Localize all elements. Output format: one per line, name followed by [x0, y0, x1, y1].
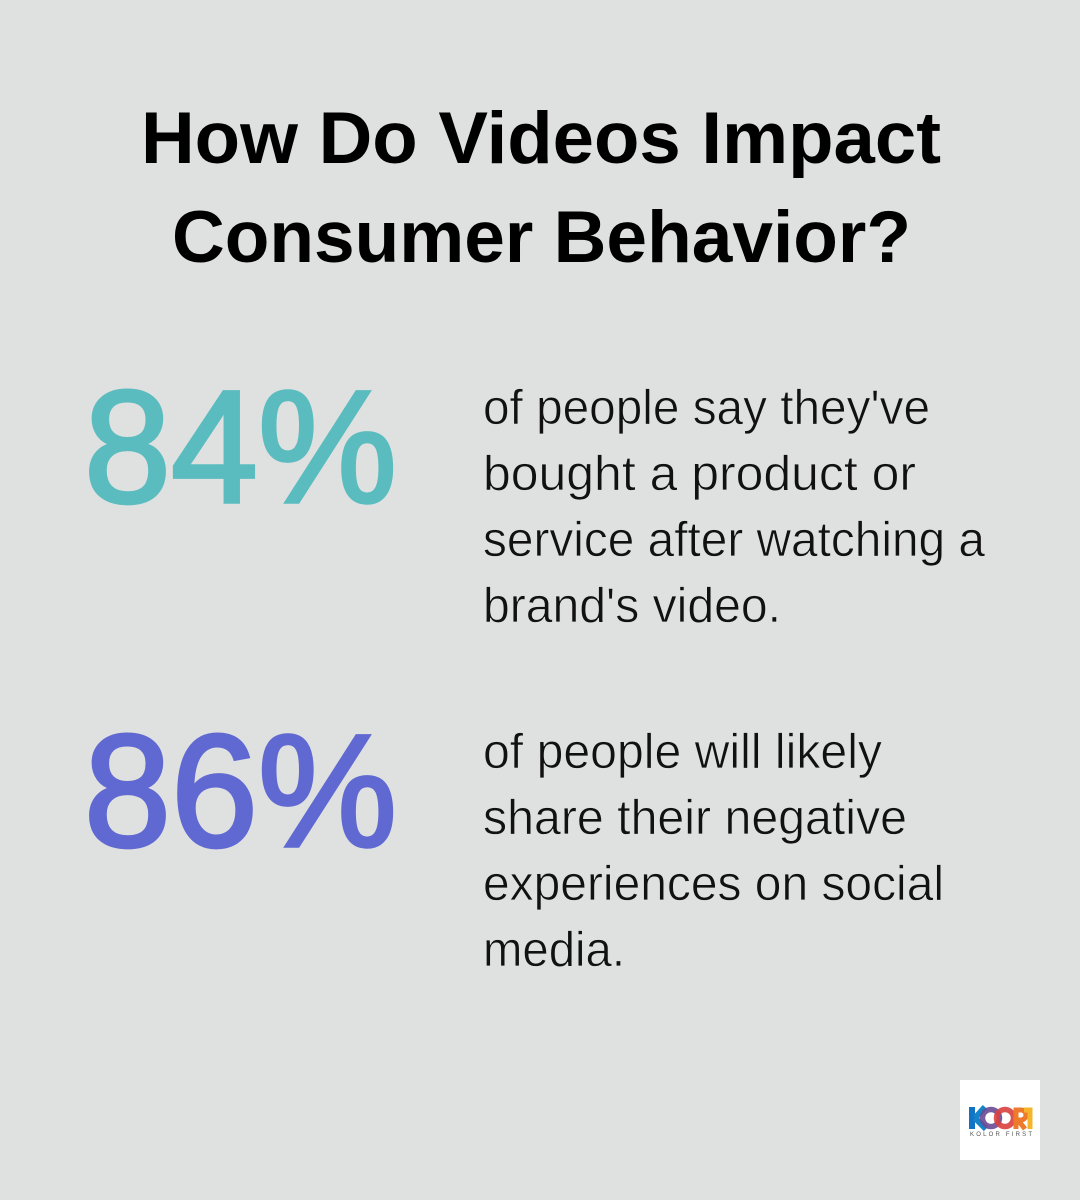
description: 84%: brand's video. — [483, 579, 781, 633]
logo tagline: KOLOR FIRST — [970, 1132, 1032, 1138]
description: 86%: media. — [483, 923, 625, 977]
logo: Koor1 Kolor First — [960, 1080, 1040, 1160]
description: 84%: service after watching a — [483, 513, 986, 567]
title: How Do Videos Impact — [141, 98, 941, 179]
statistic: 86%: 86% — [84, 701, 397, 880]
description: 84% — [483, 381, 986, 633]
logo mark — [969, 1107, 1030, 1129]
title: Consumer Behavior? — [172, 197, 911, 278]
description: 86%: of people will likely — [483, 725, 882, 779]
description: 84%: bought a product or — [483, 447, 916, 501]
description: 86%: experiences on social — [483, 857, 944, 911]
statistic: 84%: 84% — [84, 357, 397, 536]
description: 86%: share their negative — [483, 791, 907, 845]
description: 84%: of people say they've — [483, 381, 930, 435]
title — [141, 98, 941, 278]
description: 86% — [483, 725, 944, 977]
